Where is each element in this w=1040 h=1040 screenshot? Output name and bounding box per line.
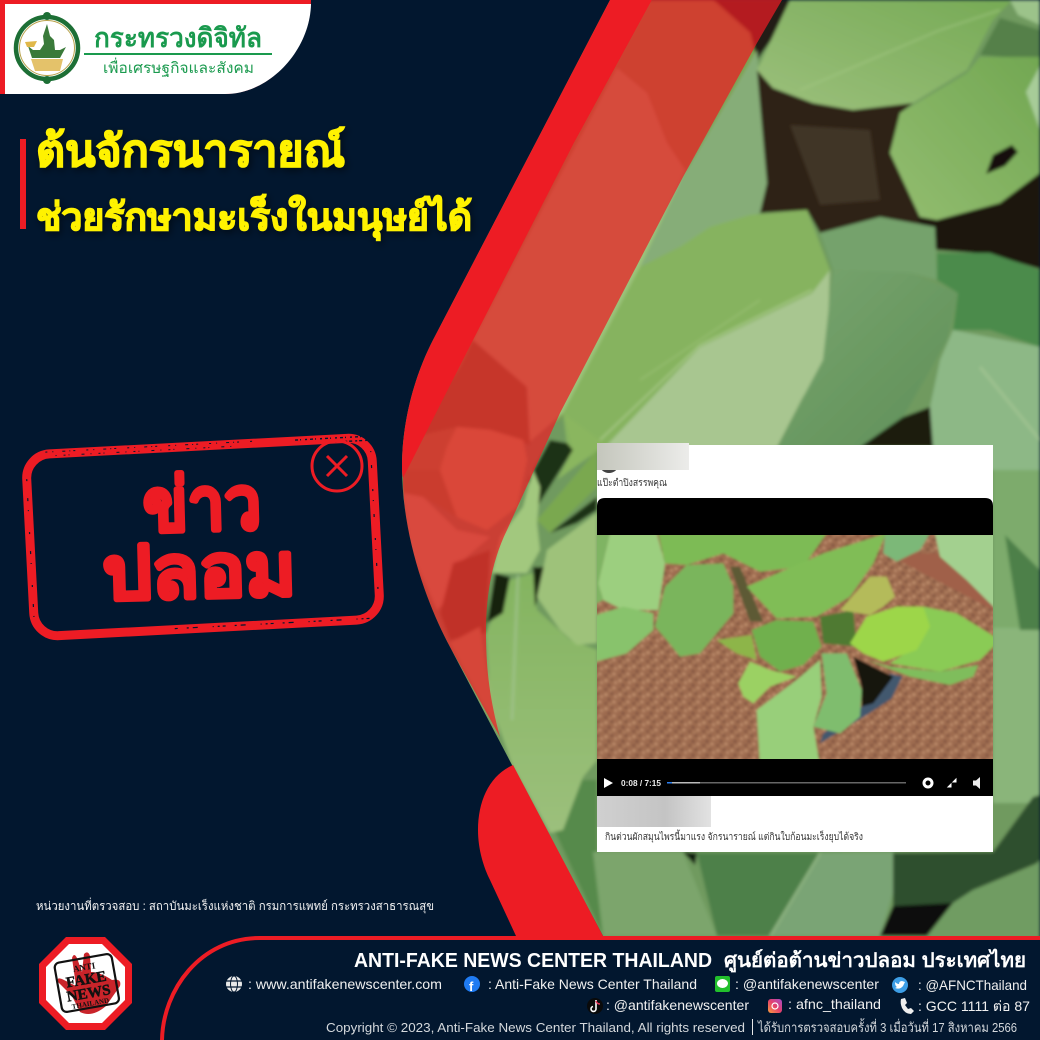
leaves: right strip	[993, 470, 1040, 630]
contact row 1: : Anti-Fake News Center Thailand	[488, 976, 697, 992]
contact row 2: : afnc_thailand	[788, 996, 881, 1012]
leaf: far top right	[1010, 0, 1040, 25]
under overlay: lower frilly leaves	[440, 427, 527, 530]
leaf: right dark	[937, 253, 1040, 347]
video player	[590, 498, 1000, 796]
ministry name: กระทรวงดิจิทัล	[94, 23, 262, 53]
footer heading: ศูนย์ต่อต้านข่าวปลอม ประเทศไทย	[724, 948, 1026, 974]
icon: tiktok	[587, 998, 603, 1014]
title accent bar	[20, 139, 26, 229]
icon: globe	[226, 976, 242, 992]
blurred name bottom	[597, 796, 711, 827]
footer heading: ANTI-FAKE NEWS CENTER THAILAND	[354, 950, 712, 972]
dark hole	[487, 573, 510, 623]
stem	[537, 450, 597, 533]
player controls: 0:08 / 7:15	[621, 779, 662, 788]
copyright	[326, 1018, 1017, 1035]
leaf: lower right	[927, 860, 1040, 936]
dark gap right	[917, 172, 1040, 269]
red corner shape	[478, 765, 603, 936]
post text: กินต่วนผักสมุนไพรนี้มาแรง จักรนารายณ์ แต่กินใบก้อนมะเร็งยุบได้จริง	[605, 829, 863, 843]
header logo panel	[0, 0, 311, 94]
leaf: dark top right	[980, 18, 1040, 60]
icon: twitter	[892, 977, 908, 993]
icon: facebook: f	[469, 979, 474, 994]
footer band	[0, 936, 1040, 1040]
stamp text: ข่าว	[142, 461, 262, 547]
hole in leaf	[986, 145, 1018, 174]
ministry subtitle: เพื่อเศรษฐกิจและสังคม	[103, 57, 254, 77]
dark behind stem	[528, 440, 573, 507]
anti fake news logo	[39, 937, 132, 1030]
leaf: bottom center	[697, 853, 820, 936]
icon: facebook	[464, 976, 480, 994]
leaf: right top	[890, 57, 1040, 220]
navy panel	[0, 0, 610, 936]
stamp box	[54, 953, 120, 1013]
stamp box: ANTI	[72, 960, 96, 974]
title: ต้นจักรนารายณ์	[36, 126, 345, 176]
contact row 1	[226, 976, 1027, 994]
leaf: centre big, dark half	[563, 210, 830, 470]
dark lower right	[893, 795, 1040, 907]
leaf: lower-left long	[486, 573, 597, 833]
leaf: upper left	[640, 50, 767, 267]
dark gap below mid leaf	[860, 407, 935, 447]
leaf: upper mid	[820, 217, 937, 280]
icon: ministry emblem	[16, 12, 78, 84]
screenshot card	[590, 443, 1000, 852]
leaf: top	[757, 0, 1012, 110]
stamp box: FAKE	[65, 969, 108, 991]
under overlay: dark leaf	[400, 340, 530, 470]
stamp box: NEWS	[66, 982, 112, 1006]
footer heading	[354, 948, 1026, 974]
title: ช่วยรักษามะเร็งในมนุษย์ได้	[36, 194, 472, 241]
leaf veins	[600, 290, 812, 440]
icon: line	[715, 976, 730, 992]
contact row 1: : @antifakenewscenter	[735, 976, 879, 992]
post caption: แป๊ะตำปิงสรรพคุณ	[597, 477, 667, 489]
stamp box: THAILAND	[71, 996, 110, 1011]
icon: instagram	[768, 999, 782, 1013]
icon: cross in circle	[312, 441, 362, 491]
contact row 1: : www.antifakenewscenter.com	[248, 976, 442, 992]
contact row 1: : @AFNCThailand	[918, 977, 1027, 993]
under overlay: top leaf area	[400, 0, 767, 480]
leaf: frilly	[537, 513, 597, 645]
stamp border	[25, 435, 381, 637]
leaf: bottom left	[553, 780, 603, 936]
title	[36, 126, 472, 241]
blurred name top	[597, 443, 689, 473]
black gap bottom	[880, 903, 953, 936]
player controls	[604, 777, 980, 789]
source agency: หน่วยงานที่ตรวจสอบ : สถาบันมะเร็งแห่งชาติ กรมการแพทย์ กระทรวงสาธารณสุข	[36, 897, 434, 914]
under overlay: lighter leaf	[473, 68, 685, 443]
dark hollow	[757, 70, 935, 233]
under overlay: dark corner	[713, 0, 800, 60]
leaf: centre big, light half	[600, 270, 830, 450]
icon: phone	[901, 998, 914, 1014]
stamp text	[100, 461, 297, 616]
copyright: Copyright © 2023, Anti-Fake News Center Thailand, All rights reserved	[326, 1020, 745, 1035]
leaf: mid	[778, 270, 958, 447]
stamp text: ปลอม	[102, 528, 297, 616]
icon: red hand	[58, 952, 120, 1014]
leaf: small cluster	[492, 470, 540, 573]
solid red band	[402, 0, 652, 478]
video frame: plant on soil	[597, 535, 993, 759]
leaf: right light	[930, 330, 1040, 500]
contact row 2	[587, 996, 1030, 1014]
fake news stamp	[25, 435, 381, 637]
translucent red overlay	[403, 0, 782, 737]
stem leaf	[557, 413, 607, 480]
contact row 2: : @antifakenewscenter	[606, 997, 749, 1013]
contact row 2: : GCC 1111 ต่อ 87	[918, 998, 1030, 1014]
